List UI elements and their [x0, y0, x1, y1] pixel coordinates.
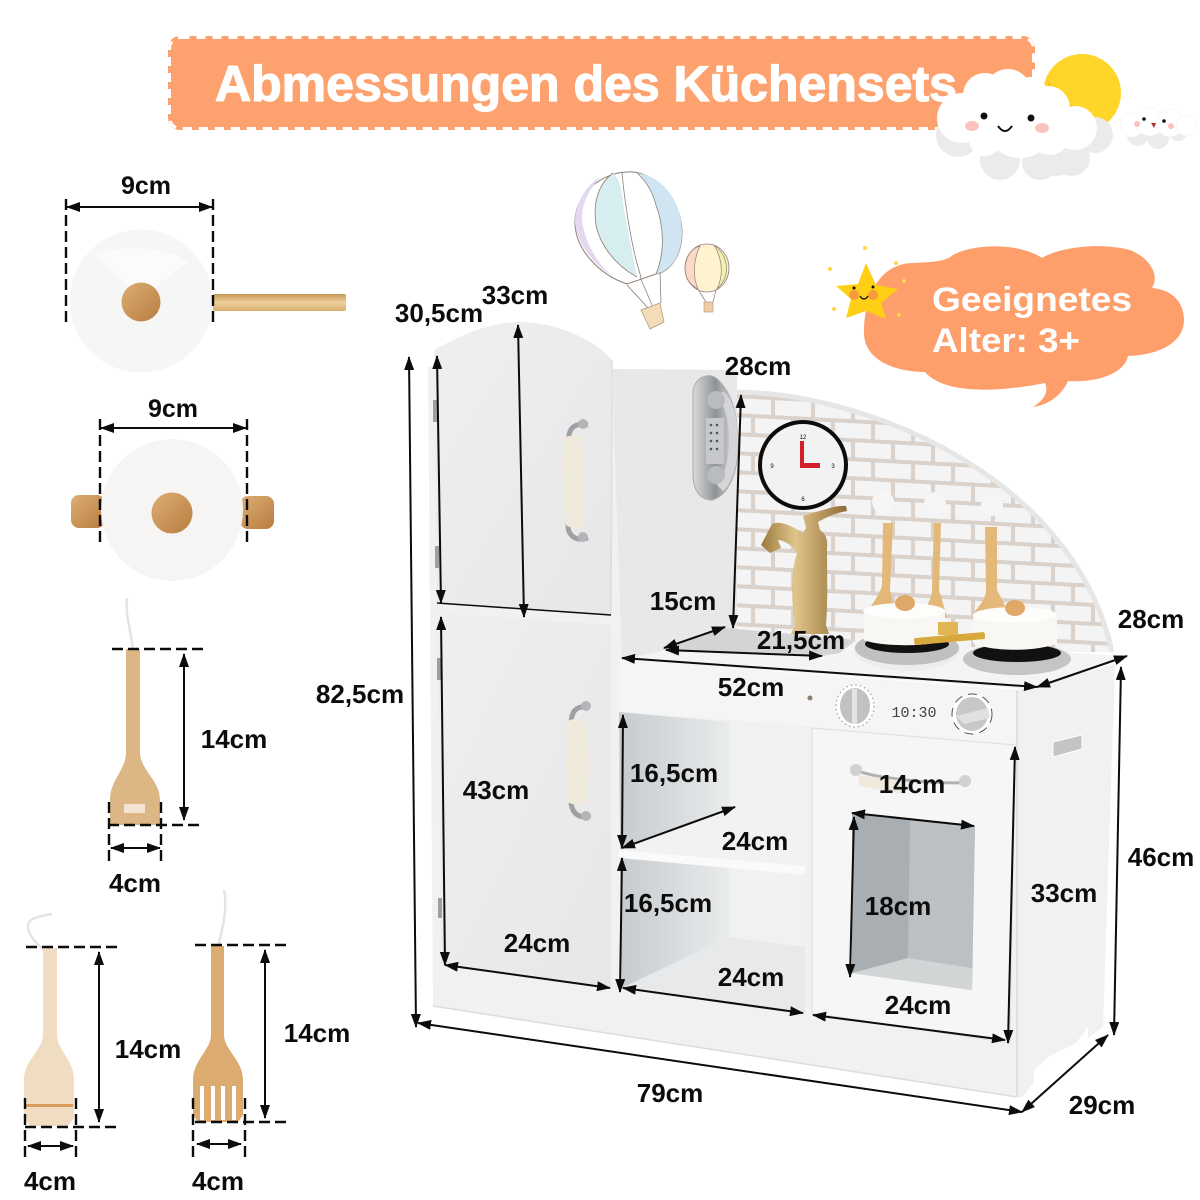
icon: sun: [1043, 54, 1121, 132]
dimension: pan width: 9cm: [121, 172, 171, 200]
wall clock: 6: [801, 497, 805, 503]
fridge lower handle: [565, 701, 591, 821]
wall clock: 12: [800, 435, 807, 441]
control panel: [620, 660, 1017, 745]
dimension: fork spatula: 14cm: [284, 1018, 350, 1048]
dimension labels on kitchen: 46cm: [1128, 842, 1194, 872]
icon: slotted fork spatula: [193, 890, 243, 1122]
dimension labels on kitchen: 15cm: [650, 586, 716, 616]
fridge lower door: [437, 613, 611, 988]
gold faucet: [761, 506, 847, 634]
dimension: pot width: [100, 395, 247, 542]
oven window: [852, 813, 975, 990]
dimension labels on kitchen: 82,5cm: [316, 679, 404, 709]
suitable age text: Geeignetes: [932, 281, 1132, 319]
oven door: [812, 728, 1015, 1043]
sink: [665, 628, 856, 656]
icon: small cloud: [1120, 108, 1196, 149]
play kitchen: [428, 322, 1127, 1097]
dimension labels on kitchen: 24cm: [885, 990, 951, 1020]
pots: [863, 595, 1057, 650]
dimension labels on kitchen: 43cm: [463, 775, 529, 805]
dimension labels on kitchen: 21,5cm: [757, 625, 845, 655]
icon: large smiling cloud: [936, 69, 1113, 180]
dimension labels on kitchen: 16,5cm: [624, 888, 712, 918]
dimension labels on kitchen: 33cm: [482, 280, 548, 310]
suitable age text: [932, 281, 1132, 360]
dimension labels on kitchen: 24cm: [718, 962, 784, 992]
wall clock: 3: [831, 464, 835, 470]
dimension labels on kitchen: 24cm: [504, 928, 570, 958]
wall clock: 9: [770, 464, 774, 470]
dimension labels on kitchen: 30,5cm: [395, 298, 483, 328]
icon: pan top view with handle: [70, 230, 346, 372]
dimension labels on kitchen: 28cm: [725, 351, 791, 381]
dimension labels on kitchen: 79cm: [637, 1078, 703, 1108]
dimension labels on kitchen: 16,5cm: [630, 758, 718, 788]
dimension arrows on kitchen: [409, 325, 1127, 1112]
stove burners: [854, 629, 1071, 675]
title: Abmessungen des Küchensets: [215, 56, 957, 112]
door outlines: [437, 603, 611, 615]
icon: slotted spatula: [110, 598, 160, 825]
icon: flat spatula: [24, 914, 74, 1126]
dimension: slotted spatula: 14cm: [201, 724, 267, 754]
speech bubble: suitable age: [864, 246, 1184, 407]
icon: large hot air balloon: [575, 172, 682, 329]
fridge body and base: [428, 367, 1017, 1097]
dimension labels on kitchen: 14cm: [879, 769, 945, 799]
dimension: pot width: 9cm: [148, 395, 198, 423]
right side panel: [1017, 664, 1115, 1097]
dimension: fork spatula: [192, 945, 350, 1196]
dimension: fork spatula: 4cm: [192, 1166, 244, 1196]
hinges: [433, 400, 442, 918]
icon: smiling star: [828, 246, 906, 319]
icon: small hot air balloon: [685, 244, 729, 312]
dimension: slotted spatula: 4cm: [109, 868, 161, 898]
dimension labels on kitchen: 18cm: [865, 891, 931, 921]
countertop: [622, 628, 1127, 690]
dimension: flat spatula: [24, 947, 181, 1196]
open shelf unit: [619, 712, 806, 1016]
control panel: 10:30: [891, 705, 937, 722]
dimension labels on kitchen: 24cm: [722, 826, 788, 856]
dimension: pan width: [66, 172, 213, 323]
icon: pot top view with two handles: [71, 439, 274, 581]
dimension: slotted spatula: [108, 649, 267, 898]
dimension: flat spatula: 14cm: [115, 1034, 181, 1064]
fridge upper handle: [562, 419, 588, 542]
tile backsplash: [733, 392, 1112, 652]
wall telephone: [693, 376, 738, 500]
shelf board: [619, 850, 805, 875]
dimension labels on kitchen: [316, 280, 1194, 1120]
title banner: [168, 36, 1035, 130]
wall clock: [760, 422, 846, 508]
suitable age text: Alter: 3+: [932, 322, 1080, 360]
fridge upper door: [434, 322, 612, 615]
hanging spatulas: [868, 491, 1006, 618]
oven handle: [855, 770, 968, 783]
back panel: [613, 369, 737, 660]
dimension labels on kitchen: 28cm: [1118, 604, 1184, 634]
dimension labels on kitchen: 29cm: [1069, 1090, 1135, 1120]
dimension labels on kitchen: 33cm: [1031, 878, 1097, 908]
dimension: flat spatula: 4cm: [24, 1166, 76, 1196]
dimension labels on kitchen: 52cm: [718, 672, 784, 702]
